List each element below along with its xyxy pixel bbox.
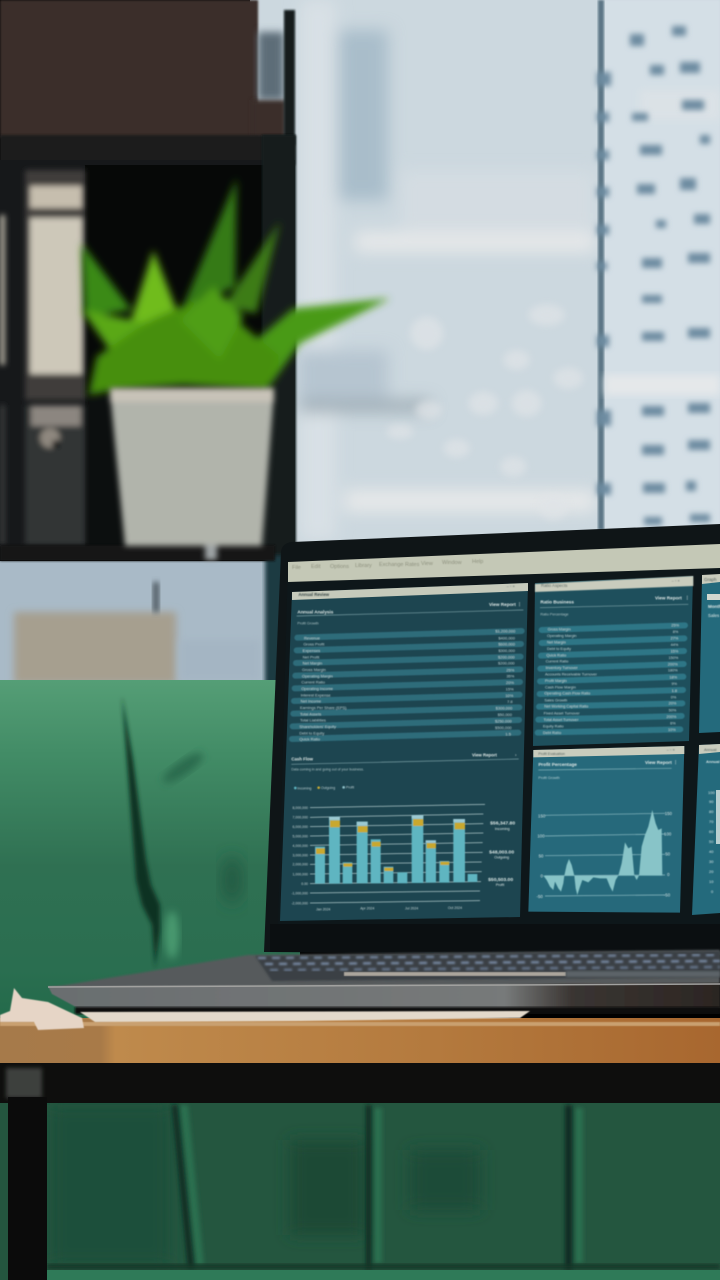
panel: ratio aspects: Total Asset Turnover (544, 718, 579, 722)
panel: ratio aspects: 15% (671, 649, 679, 653)
panel: ratio aspects: Ratio Business (540, 600, 574, 605)
panel: annual chart lower right: 100 (708, 790, 715, 795)
menu bar: Help (472, 559, 483, 565)
profit area chart: 150 (665, 811, 673, 816)
panel: annual chart lower right: 20 (709, 869, 714, 874)
table frame (0, 1063, 720, 1103)
profit area chart: 50 (665, 852, 671, 857)
profit area chart: 100 (537, 834, 545, 839)
panel: ratio aspects: 1.8 (672, 689, 677, 693)
panel: ratio aspects: Net Margin (547, 641, 566, 645)
annual analysis table: View Report (489, 602, 516, 607)
wall and furniture behind sofa (0, 545, 285, 686)
annual analysis table: 15% (506, 686, 514, 691)
annual analysis table: Annual Analysis (297, 609, 334, 614)
panel: annual chart lower right (692, 744, 720, 915)
laptop hinge (270, 924, 720, 952)
table (0, 1018, 720, 1280)
annual analysis table: Current Ratio (301, 680, 326, 685)
cash flow bar chart: 7,000,000 (292, 816, 308, 820)
profit area chart (537, 747, 678, 899)
panel: ratio aspects: Gross Margin (548, 628, 571, 632)
annual analysis table: 20% (506, 680, 514, 685)
panel: annual review (280, 583, 528, 921)
cash flow bar chart: Jan 2024 (316, 908, 331, 912)
panel: ratio aspects: 44% (671, 643, 679, 647)
laptop front edge (48, 983, 720, 1014)
profit area chart: 100 (664, 831, 672, 836)
chart gridlines and axis (310, 804, 485, 903)
annual analysis table: Net Margin (303, 661, 322, 666)
annual analysis table: $300,000 (498, 648, 516, 653)
annual analysis table: ⋮ (517, 601, 522, 608)
annual analysis table: Earnings Per Share (EPS) (300, 705, 347, 710)
annual analysis table: 7.8 (507, 699, 513, 704)
chart legend: Outgoing (321, 786, 335, 790)
panel: annual chart lower right: 40 (709, 849, 714, 854)
cash flow bar chart (291, 753, 519, 912)
annual analysis table: Net Profit (303, 654, 320, 659)
bookshelf with binders (0, 0, 296, 560)
panel: ratio aspects: 27% (671, 637, 679, 641)
panel: ratio aspects: 10% (668, 728, 676, 732)
annual analysis table: Interest Expense (301, 692, 331, 697)
panel: ratio aspects: Accounts Receivable Turnover (545, 672, 598, 676)
cash flow bar chart: Oct 2024 (448, 906, 462, 910)
annual analysis table: Shareholders' Equity (299, 724, 336, 729)
cash flow bar chart: -1,000,000 (291, 891, 308, 895)
annual analysis table: 25% (506, 667, 515, 672)
panel: ratio aspects: Inventory Turnover (546, 666, 578, 670)
laptop screen bezel (264, 524, 720, 955)
panel: annual chart lower right: 10 (709, 879, 714, 884)
cash flow totals (488, 821, 515, 887)
menu bar: Library (355, 563, 372, 569)
menu bar: Exchange Rates (379, 562, 420, 568)
panel: ratio aspects: 25% (671, 624, 680, 628)
panel: ratio aspects: Profit Margin (545, 679, 567, 683)
profit area chart: View Report (645, 760, 672, 765)
annual analysis table: – ▫ × (507, 583, 515, 588)
background: city window (250, 0, 720, 560)
panel: annual chart lower right: 90 (709, 799, 714, 804)
annual analysis table: $250,000 (495, 718, 512, 723)
annual analysis table: 1.5 (505, 731, 512, 736)
panel: annual chart lower right: 30 (709, 859, 714, 864)
panel: ratio aspects: Debt Ratio (543, 731, 561, 735)
sofa back cushions (0, 680, 300, 1025)
annual analysis table: 10% (505, 693, 514, 698)
cash flow bar chart: -2,000,000 (291, 901, 308, 905)
laptop (48, 524, 720, 1014)
panel: ratio aspects: Cash Flow Margin (545, 685, 576, 689)
panel: ratio aspects: 150% (669, 656, 679, 660)
panel: annual chart lower right: 70 (709, 819, 714, 824)
panel: ratio aspects: 9% (671, 682, 678, 686)
profit area chart: 50 (539, 854, 544, 859)
menu bar: Edit (311, 564, 321, 570)
panel: ratio aspects: 8% (673, 630, 679, 634)
cash flow totals: Profit (496, 883, 504, 887)
annual analysis table: Operating Margin (302, 673, 333, 678)
laptop keyboard deck (48, 950, 720, 988)
panel: ratio aspects: Fixed Asset Turnover (544, 712, 580, 716)
table top wood (0, 1018, 720, 1064)
chart legend (294, 786, 354, 790)
window reflections (298, 0, 595, 540)
panel: ratio aspects: – ▫ × (672, 578, 680, 583)
chart bars (315, 815, 477, 884)
application screen background (278, 545, 720, 928)
panel: ratio aspects: Net Working Capital Ratio (544, 705, 588, 709)
cash flow bar chart: › (515, 753, 517, 758)
panel: ratio aspects: Quick Ratio (546, 653, 566, 657)
cushion crease (122, 696, 160, 968)
panel: ratio aspects: 0% (671, 695, 677, 699)
annual analysis table: Operating Income (301, 686, 334, 691)
panel: ratio aspects: Operating Margin (547, 634, 577, 638)
cash flow totals: $56,347.80 (490, 821, 515, 827)
panel: ratio aspects: Debt to Equity (547, 647, 571, 651)
panel: ratio aspects: View Report (655, 596, 682, 601)
panel: ratio aspects: Ratio Aspects (541, 583, 567, 588)
cash flow bar chart: View Report (472, 753, 497, 758)
annual analysis table: Gross Margin (302, 667, 326, 672)
panel: ratio aspects: Operating Cash Flow Ratio (544, 692, 590, 696)
cash flow bar chart: Jul 2024 (405, 907, 418, 911)
cash flow bar chart: 0.00 (301, 882, 308, 886)
profit area chart: – ▫ × (667, 747, 675, 752)
panel: ratio aspects: 6% (670, 721, 676, 725)
profit area chart: Profit Growth (538, 776, 560, 780)
annual analysis table: Profit Growth (297, 621, 319, 625)
menu bar (288, 544, 720, 582)
chart legend: Profit (346, 786, 354, 790)
profit area chart: ⋮ (673, 759, 678, 766)
menu bar: Options (330, 564, 349, 570)
panel: ratio aspects: 50% (669, 709, 677, 713)
annual analysis table: Total Assets (300, 711, 321, 716)
chart legend: Incoming (297, 786, 312, 790)
sofa seat lower section (0, 1100, 720, 1280)
panel: annual chart lower right: Annual (704, 747, 717, 752)
cash flow bar chart: 3,000,000 (292, 853, 308, 857)
profit area chart: -50 (537, 894, 543, 899)
cash flow totals: Outgoing (494, 855, 509, 859)
profit area chart: Profit Evaluation (538, 752, 565, 756)
cash flow bar chart: Apr 2024 (360, 907, 374, 911)
annual analysis table: Revenue (304, 635, 321, 640)
annual analysis table: Gross Profit (303, 642, 325, 647)
panel: ratio aspects: Current Ratio (546, 660, 568, 664)
panel: ratio aspects: 18% (669, 676, 678, 680)
annual analysis table: 35% (506, 674, 515, 679)
annual analysis table: $200,000 (498, 654, 515, 659)
panel: annual chart lower right: 80 (709, 809, 714, 814)
annual analysis table: Total Liabilities (300, 718, 326, 723)
cash flow bar chart: 2,000,000 (292, 863, 308, 867)
panel: ratio aspects: Ratio Percentage (540, 613, 569, 617)
annual analysis table: $500,000 (495, 725, 512, 730)
profit area chart: -50 (664, 892, 671, 897)
cash flow bar chart: 8,000,000 (292, 806, 308, 810)
panel: annual chart lower right: 50 (709, 839, 714, 844)
panel: annual chart lower right: Annual (706, 759, 720, 764)
panel: graph overview top: Sales (708, 613, 720, 618)
annual analysis table (292, 583, 523, 742)
binder spines (0, 170, 85, 545)
annual analysis table: Annual Review (298, 592, 330, 597)
annual analysis table: $400,000 (498, 635, 516, 640)
panel: ratio aspects: ⋮ (685, 595, 690, 602)
cash flow bar chart: Data coming in and going out of your business. (291, 768, 364, 772)
icon: potted plant (82, 178, 390, 560)
profit area chart: 0 (540, 874, 543, 879)
cash flow totals: $50,503.00 (488, 877, 513, 883)
cash flow totals: $48,003.00 (489, 850, 514, 856)
panel: annual chart lower right: 0 (711, 889, 714, 894)
cash flow bar chart: Cash Flow (291, 757, 314, 762)
annual analysis table: $200,000 (498, 661, 515, 666)
panel: ratio aspects: 200% (668, 662, 678, 666)
annual analysis table: $600,000 (498, 642, 516, 647)
table leg (8, 1097, 47, 1280)
annual analysis table: Debt to Equity (299, 730, 324, 735)
panel: profit percentage (528, 746, 684, 913)
profit area chart: 150 (538, 813, 546, 818)
cash flow bar chart: 1,000,000 (292, 872, 308, 876)
panel: ratio aspects: 200% (667, 715, 677, 719)
menu bar: File (292, 565, 301, 571)
panel: graph overview top (699, 574, 720, 733)
profit area chart: Profit Percentage (538, 762, 577, 767)
panel: ratio aspects (533, 576, 693, 746)
annual analysis table: $50,000 (498, 712, 513, 717)
panel: graph overview top: Graph (704, 577, 717, 582)
cash flow bar chart: 4,000,000 (292, 844, 308, 848)
annual analysis table: $1,200,000 (495, 629, 516, 634)
cash flow bar chart: 6,000,000 (292, 825, 308, 829)
annual analysis table: Expenses (303, 648, 320, 653)
profit area chart: 0 (667, 872, 670, 877)
annual analysis table: Net Income (301, 699, 322, 704)
panel: ratio aspects: 20% (669, 702, 677, 706)
cash flow bar chart: 5,000,000 (292, 834, 308, 838)
panel: ratio aspects: Equity Ratio (543, 724, 564, 728)
panel: annual chart lower right: 60 (709, 829, 714, 834)
plant pot (110, 388, 274, 560)
annual analysis table: Quick Ratio (299, 737, 321, 742)
panel: ratio aspects: Sales Growth (544, 698, 567, 702)
right building column (604, 0, 720, 530)
menu bar: View (421, 561, 433, 567)
annual analysis table: $300,000 (496, 706, 513, 711)
papers under laptop (0, 988, 530, 1030)
cash flow totals: Incoming (495, 827, 510, 831)
panel: ratio aspects: 180% (668, 669, 678, 673)
menu bar: Window (442, 560, 462, 566)
